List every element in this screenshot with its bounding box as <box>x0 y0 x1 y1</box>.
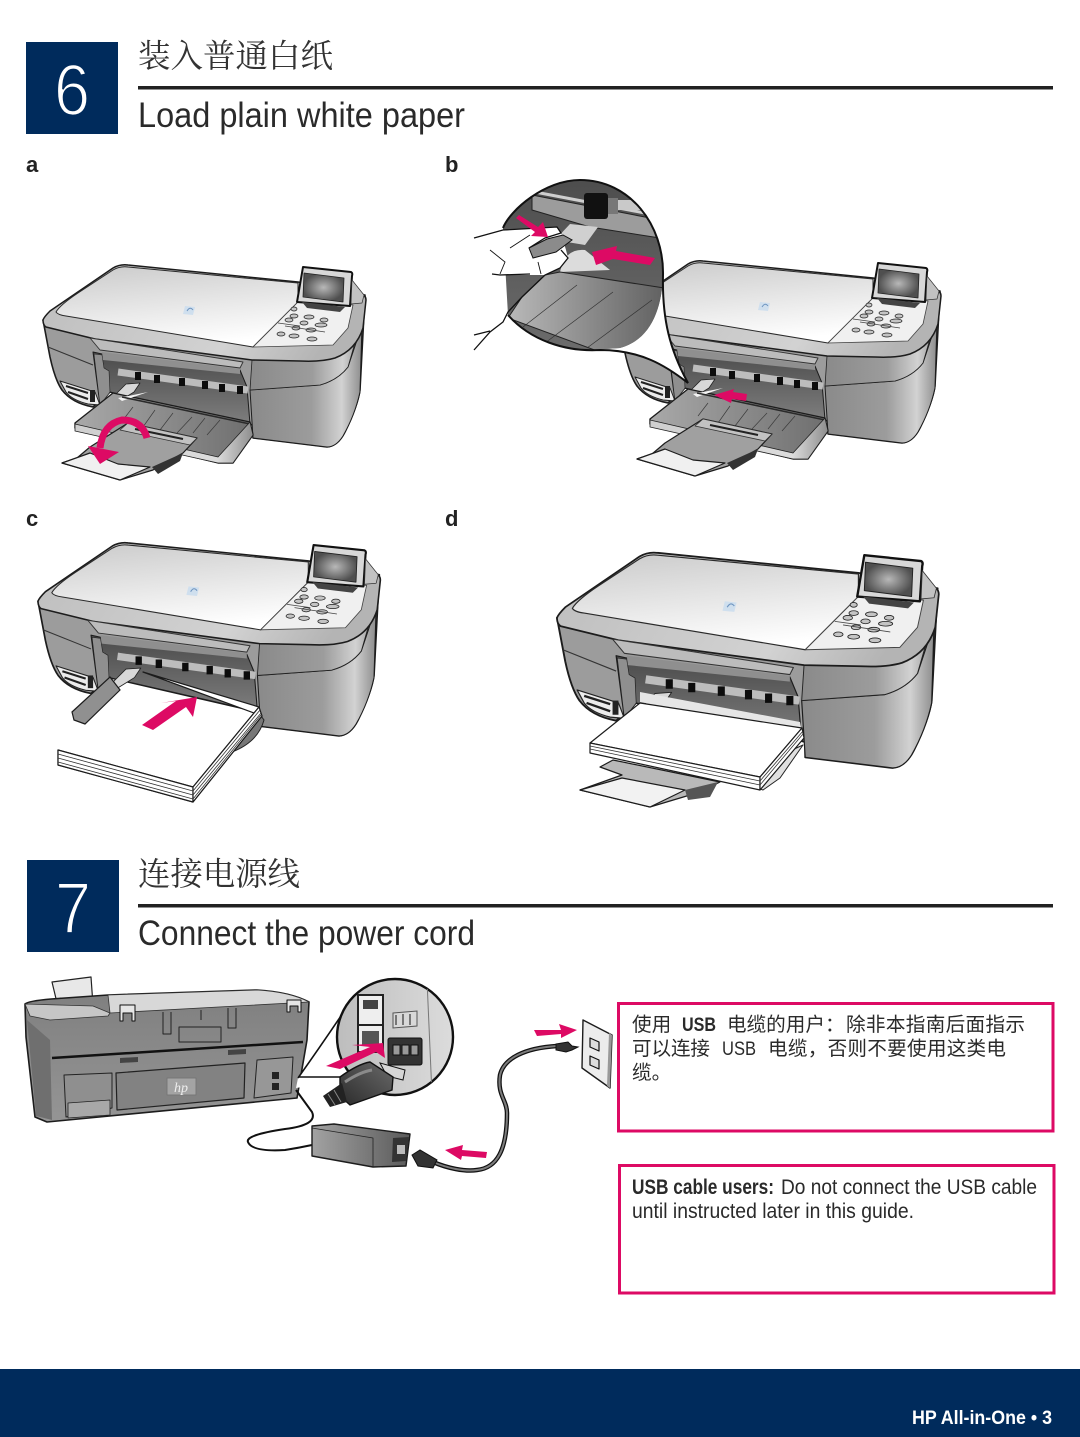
step 7 header <box>27 856 1053 953</box>
illustration a: printer with tray extension flipped <box>43 265 366 480</box>
callout: chinese USB warning: 缆。 <box>632 1062 671 1084</box>
callout: english USB warning: Do not connect the USB cable <box>781 1176 1037 1199</box>
wall plug <box>556 1042 578 1052</box>
callout: chinese USB warning: 电缆的用户： <box>727 1014 845 1036</box>
icon: arrow into socket <box>326 1043 385 1069</box>
step 6 english title: Load plain white paper <box>138 96 465 135</box>
callout: chinese USB warning: USB <box>682 1014 716 1036</box>
step 7 number badge: 7 <box>55 869 91 949</box>
step 6 number badge: 6 <box>54 51 90 131</box>
page label: HP All-in-One • 3 <box>912 1408 1052 1429</box>
step 6 header <box>26 38 1053 135</box>
icon: arrow to wall outlet <box>534 1024 577 1038</box>
callout: chinese USB warning: USB <box>722 1038 756 1060</box>
icon: curved arrow <box>88 420 147 464</box>
callout: chinese USB warning <box>618 1004 1053 1131</box>
illustration d: printer with paper loaded <box>557 553 939 807</box>
power adapter <box>312 1124 410 1167</box>
icon: arrow to adapter <box>445 1145 487 1160</box>
step 7 chinese title: 连接电源线 <box>138 856 300 893</box>
callout: chinese USB warning: 使用 <box>632 1014 671 1036</box>
paper stack <box>58 672 262 802</box>
callout: english USB warning: USB cable users: <box>632 1176 774 1199</box>
illustration b: printer with paper guide inset <box>474 178 941 476</box>
callout: port close-up <box>296 979 453 1107</box>
callout inset: finger on guide <box>474 178 688 383</box>
label b: b <box>445 152 458 177</box>
step 7 english title: Connect the power cord <box>138 914 475 953</box>
callout: english USB warning: until instructed later in this guide. <box>632 1200 914 1223</box>
illustration c: printer with paper being inserted <box>38 543 380 802</box>
thin adapter cable <box>248 1090 313 1150</box>
icon: arrow to finger <box>516 215 548 237</box>
step 6 number badge <box>26 42 118 134</box>
illustration: back of printer <box>25 977 309 1122</box>
label c: c <box>26 506 38 531</box>
callout: chinese USB warning: 可以连接 <box>632 1038 710 1060</box>
extended tray <box>580 745 803 807</box>
callout: chinese USB warning: 电缆，否则不要使用这类电 <box>768 1038 1006 1060</box>
power plug <box>323 1062 405 1107</box>
step 7 number badge <box>27 860 119 952</box>
female plug <box>412 1150 437 1168</box>
icon: arrow to paper edge <box>592 246 655 265</box>
icon: arrow toward printer <box>142 697 197 730</box>
wall outlet <box>582 1020 612 1088</box>
power cord <box>412 1042 578 1171</box>
hp logo <box>167 1078 196 1096</box>
callout: chinese USB warning: 除非本指南后面指示 <box>846 1014 1025 1036</box>
icon: arrow at paper guide <box>714 389 747 403</box>
small tray stub <box>72 677 120 724</box>
paper stack <box>590 703 804 790</box>
hp logo: hp <box>174 1081 188 1096</box>
callout: english USB warning <box>620 1166 1054 1293</box>
label d: d <box>445 506 458 531</box>
hand holding guide <box>474 227 572 350</box>
label a: a <box>26 152 39 177</box>
step 6 chinese title: 装入普通白纸 <box>138 38 333 75</box>
footer bar <box>0 1369 1080 1437</box>
